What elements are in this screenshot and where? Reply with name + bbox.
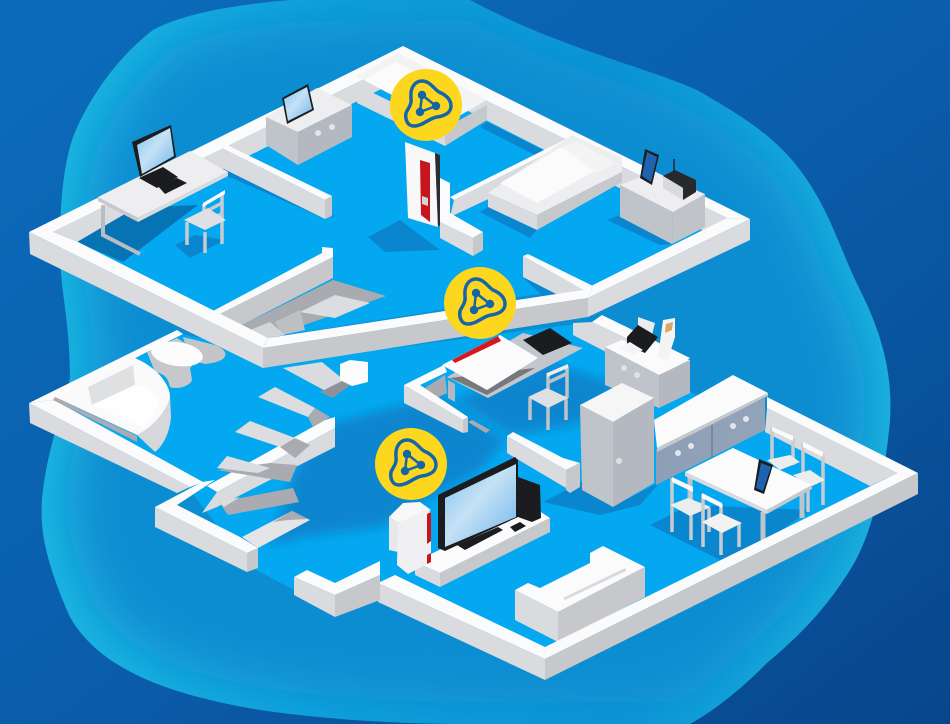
bathroom back wall [29,330,183,403]
floor shadow of router [368,220,440,252]
cabinet with monitor [266,84,352,165]
back wall behind printer [573,315,690,390]
desk shadow [455,362,620,435]
table [685,448,812,540]
cabinet knobs [621,365,640,378]
monitor [132,125,176,177]
desk legs [103,205,140,254]
desk surface [447,333,583,398]
stairwell opening [242,280,386,338]
bathroom front wall [29,400,203,493]
bathtub [53,358,171,452]
tv bench [415,505,550,587]
kitchen counter [654,375,768,485]
computer base [139,167,178,188]
dining set [670,427,825,555]
desk leg [448,380,455,402]
tv [438,457,518,551]
mesh repeater [405,142,440,227]
dining shadow [650,505,810,560]
desk top [98,151,228,222]
under stairs block [283,360,368,398]
stair back wall [202,417,335,513]
handset [754,459,773,494]
adapter top [389,502,431,523]
inner wall left [222,145,332,219]
front chair 2 [702,493,742,555]
floor surface [54,322,897,660]
right outer wall [588,218,750,317]
tread 4 [219,488,299,515]
back bed shadow [480,122,543,155]
right cabinet shadow [607,215,672,245]
laptop [523,328,572,355]
upper floor [29,46,750,368]
divider wall [450,138,572,217]
stair base wall [155,480,258,572]
right cabinet [620,149,705,244]
cabinet knobs [315,124,335,136]
desk base wall [404,365,468,433]
back wall lower right [765,397,918,486]
back left wall [29,46,403,242]
chair shadow [175,235,225,258]
counter knobs [675,416,749,456]
right bed shadow [480,207,537,238]
tread 3 [217,456,297,482]
staircase [202,387,335,548]
front chair 1 [670,477,711,540]
repeater body [405,142,438,227]
lower floor [29,315,918,680]
desk foot [468,420,490,433]
display [422,196,428,206]
router wall stub [440,178,483,256]
repeater side [435,153,440,227]
sofa [515,546,645,642]
back chairs [767,427,825,512]
drawing board [442,335,538,395]
tread 5 [242,511,310,548]
tread 2 [235,421,310,458]
chair [528,364,568,430]
mesh badge 2 [444,267,516,339]
mesh badge 1 [390,69,462,141]
back right wall [403,46,750,231]
toilet [147,337,225,388]
printer cabinet [605,317,690,408]
desk with computer [98,125,228,254]
telephone [658,318,675,362]
desk shadow [77,205,198,262]
chair [184,190,226,253]
front outer wall [263,285,593,368]
desk area [404,328,583,433]
cupboard shadow [543,480,660,515]
left outer wall [29,232,268,368]
tablet phone [640,149,659,185]
entrance wall stub [294,561,380,617]
game console [518,477,541,522]
radio [663,159,696,200]
adapter back [389,517,398,552]
back bed [357,53,487,146]
monitor [282,84,314,124]
mesh badge 3 [375,428,447,500]
right bed [488,135,622,230]
tall cupboard [580,383,654,507]
short inner wall [515,254,593,298]
printer [620,317,658,355]
red stripes [427,512,431,544]
tread 1 [258,387,330,427]
powerline adapter [389,502,431,574]
bottom right wall [545,473,918,680]
keyboard [157,178,187,194]
adapter body [397,510,431,574]
red panel [420,160,430,222]
shadow under upper floor [270,395,505,545]
floor surface [53,60,727,338]
bottom left wall [378,575,545,680]
stairwell rail wall [213,247,333,325]
inner wall shadow [225,165,335,219]
middle wall [507,432,580,493]
game controller [510,522,526,532]
